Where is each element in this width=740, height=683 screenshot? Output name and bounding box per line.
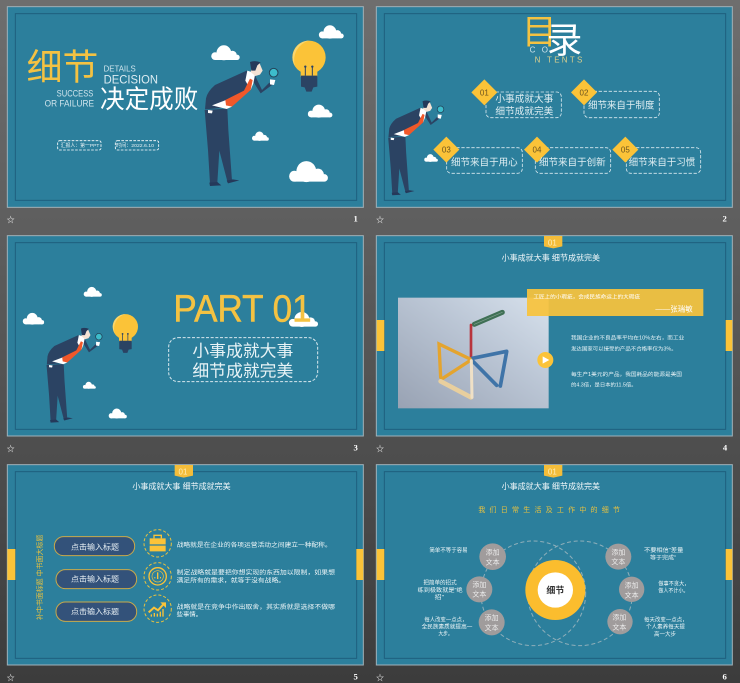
button 3: 点击输入标题 (71, 606, 119, 616)
quote banner: 工匠上的小瑕疵，会成民族命运上的大瑕疵 (533, 292, 641, 300)
item 03 (433, 137, 522, 173)
body text (571, 334, 685, 388)
node labels: 文本 (625, 591, 639, 600)
left notes: 每人改变一点点， (424, 615, 467, 623)
text: DETAILS: DETAILS (104, 64, 136, 74)
quote banner (527, 289, 703, 316)
heading: 小事成就大事 细节成就完美 (502, 252, 600, 262)
vertical yellow caption: 补中书面标题 中书面大标题 (35, 535, 44, 620)
number tag 01 (175, 465, 193, 478)
illustration: businessman (47, 328, 102, 423)
dashed box subtitle (169, 338, 318, 382)
panel: slide 1 cover (7, 7, 363, 225)
descriptions (177, 541, 335, 619)
left notes (418, 546, 473, 637)
tag: presenter (58, 141, 101, 150)
illustration: businessman (388, 101, 444, 195)
heading: 目: 目 (522, 14, 557, 52)
footer: star and number 1: ☆ (7, 216, 15, 225)
body text: 发达国家可以接受的产品不合格率仅为3%。 (571, 344, 677, 352)
centre ring: 细节 (525, 560, 585, 620)
dashed orbit circles (481, 541, 632, 646)
footer: star and number 5: 5 (353, 671, 358, 681)
centre ring: 细节: 细节 (546, 584, 564, 595)
item 03: 细节来自于用心 (451, 156, 518, 168)
item 04: 04 (533, 146, 542, 155)
left notes: 练到极致就是“绝 (418, 586, 463, 594)
heading: 录: 录 (547, 21, 582, 61)
tag: date: 时间：2022.6.10 (116, 142, 154, 149)
node labels: 添加 (486, 547, 500, 556)
left notes: 招” (435, 593, 444, 601)
heading: PART 01: PART 01 (173, 289, 312, 331)
body text: 每生产1美元的产品，我国耗品的能源是美国 (571, 370, 682, 378)
right notes: 不要相信“差量 (644, 546, 684, 554)
footer: star and number 3: ☆ (7, 445, 15, 454)
heading: 决定成败: 决定成败 (100, 86, 198, 114)
icon: gauge (144, 563, 171, 590)
tag: presenter: 汇报人：第一PPT (61, 142, 99, 149)
panel: slide 3 part 01 (7, 236, 363, 454)
footer: star and number 3 (7, 442, 358, 454)
right notes: 做事不贪大， (658, 579, 689, 587)
number tag 01: 01 (548, 468, 557, 477)
footer: star and number 2: ☆ (376, 216, 384, 225)
footer: star and number 6 (376, 671, 727, 683)
tag: date (115, 141, 159, 150)
right notes (644, 546, 689, 638)
node labels: 添加 (472, 580, 486, 589)
item 01: 细节成就完美 (495, 105, 554, 117)
panel: slide 4 quote and photo (376, 236, 732, 454)
right notes: 做人不计小。 (658, 586, 688, 594)
button 3 (56, 602, 137, 621)
footer: star and number 4: 4 (723, 442, 728, 452)
item 01 (471, 79, 561, 118)
text: SUCCESS: SUCCESS (57, 88, 93, 98)
footer: star and number 2: 2 (722, 213, 727, 223)
clouds (23, 287, 318, 419)
footer: star and number 1 (7, 214, 358, 225)
photo: coloured sticks (398, 298, 549, 408)
node labels: 文本 (486, 557, 500, 566)
item 03: 03 (442, 146, 451, 155)
text: OR FAILURE: OR FAILURE (45, 99, 94, 109)
heading: 细节: 细节 (27, 46, 98, 87)
footer: star and number 4 (376, 442, 728, 454)
quote banner: ——张瑞敏 (655, 304, 693, 313)
text: N TENTS: N TENTS (535, 56, 582, 65)
body text: 我国企业的不良品率平均在10%左右，而工业 (571, 334, 685, 342)
side tabs (7, 549, 363, 580)
subtitle: 我们日常生活及工作中的细节 (478, 505, 620, 514)
icon: growth chart (144, 595, 171, 622)
icon: play button (537, 352, 553, 368)
footer: star and number 6: ☆ (376, 674, 384, 683)
left notes: 全民族素质就提高一 (422, 622, 473, 630)
panel: slide 6 details diagram (376, 465, 732, 683)
icon: light bulb (292, 41, 326, 92)
side tabs (377, 549, 732, 580)
number tag 01 (544, 236, 562, 248)
descriptions: 制定战略就是要把你想实现的东西加以限制，如果想 (177, 568, 335, 576)
left notes: 把简单的招式 (423, 579, 457, 587)
item 02: 细节来自于制度 (588, 100, 655, 112)
item 01: 01 (480, 88, 489, 97)
panel: slide 2 contents (376, 7, 732, 225)
node circles (466, 543, 644, 635)
footer: star and number 5 (7, 671, 358, 683)
item 05: 细节来自于习惯 (629, 156, 696, 168)
item 01: 小事成就大事 (495, 93, 554, 105)
number tag 01 (544, 465, 562, 478)
heading: 小事成就大事 细节成就完美 (502, 481, 600, 491)
node labels: 文本 (485, 623, 499, 632)
panel: slide 5 strategy list (7, 465, 363, 683)
icon: light bulb (113, 314, 138, 353)
right notes: 个人素养每天提 (646, 623, 685, 631)
footer: star and number 4: ☆ (376, 445, 384, 454)
node labels: 文本 (612, 622, 626, 631)
descriptions: 战略就是在竞争中作出取舍，其实质就是选择不做哪 (177, 603, 335, 611)
item 04 (524, 137, 611, 173)
descriptions: 战略就是在企业的各项运营活动之间建立一种配称。 (177, 541, 332, 549)
footer: star and number 3: 3 (353, 442, 358, 452)
clouds (211, 25, 344, 182)
button 1: 点击输入标题 (71, 542, 119, 552)
dashed box subtitle: 细节成就完美 (192, 362, 293, 381)
dashed box subtitle: 小事成就大事 (192, 342, 293, 361)
right notes: 高一大步 (654, 630, 676, 638)
node labels: 文本 (611, 557, 625, 566)
node labels: 添加 (611, 547, 625, 556)
footer: star and number 6: 6 (722, 671, 727, 681)
body text: 的4.3倍，是日本的11.5倍。 (571, 380, 637, 388)
button 2 (56, 570, 137, 589)
node labels: 文本 (472, 590, 486, 599)
footer: star and number 5: ☆ (7, 674, 15, 683)
item 04: 细节来自于创新 (539, 156, 606, 168)
descriptions: 满足所有的需求，就等于没有战略。 (177, 577, 285, 585)
number tag 01: 01 (548, 239, 557, 248)
text: DECISION: DECISION (104, 73, 158, 87)
right notes: 等于完成” (650, 553, 676, 561)
item 02: 02 (580, 88, 589, 97)
heading: 小事成就大事 细节成就完美 (132, 481, 231, 491)
item 02 (571, 79, 659, 118)
item 05: 05 (621, 146, 630, 155)
node labels: 添加 (625, 581, 639, 590)
button 1 (54, 537, 135, 556)
cloud (424, 154, 438, 162)
number tag 01: 01 (179, 468, 188, 477)
illustration: businessman (205, 61, 278, 186)
text: CO: C O (530, 46, 548, 55)
node labels: 添加 (612, 612, 626, 621)
descriptions: 些事情。 (177, 611, 202, 619)
right notes: 每天改变一点点， (644, 616, 688, 624)
button 2: 点击输入标题 (71, 574, 119, 584)
left notes: 大步。 (438, 629, 453, 637)
node labels (472, 547, 639, 632)
node labels: 添加 (485, 613, 499, 622)
icon: briefcase (144, 530, 171, 557)
side tabs (377, 320, 732, 351)
item 05 (612, 137, 701, 173)
footer: star and number 2 (376, 213, 727, 225)
footer: star and number 1: 1 (353, 214, 358, 224)
left notes: 简单不等于容易 (429, 546, 468, 554)
